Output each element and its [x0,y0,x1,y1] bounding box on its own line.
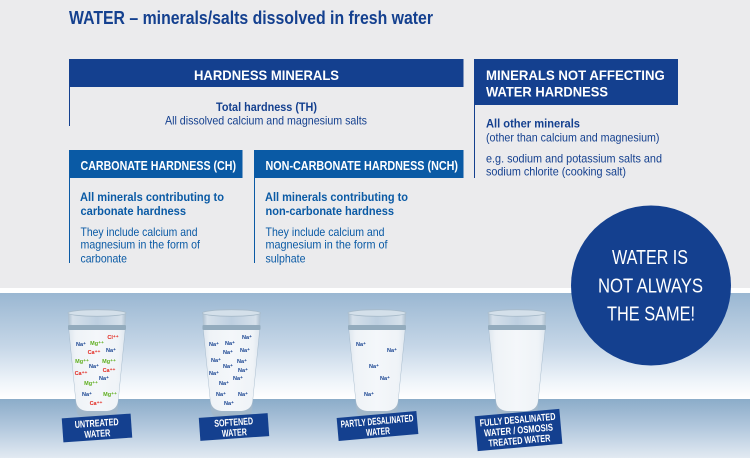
callout circle [571,206,731,366]
callout: water is not always the same [571,206,731,366]
title: WATER – minerals/salts dissolved in fresh water [69,8,433,28]
minerals not affecting heading: WATER HARDNESS [486,84,608,100]
mineral ions in untreated water: Cl⁺⁺ [107,334,119,341]
background: upper panel [0,0,750,288]
total hardness text [165,100,367,128]
glass: partly desalinated water [337,310,418,441]
carbonate hardness header [69,150,242,178]
mineral ions in untreated water: Na⁺ [106,347,116,354]
mineral ions in untreated water: Na⁺ [76,341,86,348]
mineral ions in untreated water: Mg⁺⁺ [102,358,116,365]
sodium ions in partly desalinated water: Na⁺ [369,363,379,370]
label: softened water [199,413,269,441]
sodium ions in softened water: Na⁺ [238,367,248,374]
minerals not affecting heading [486,67,665,100]
callout text: NOT ALWAYS [598,276,703,298]
mineral ions in untreated water: Mg⁺⁺ [90,340,104,347]
mineral ions in untreated water: Na⁺ [82,391,92,398]
glass: fully desalinated water [475,310,562,451]
non-carbonate hardness header [254,150,464,178]
sodium ions in softened water: Na⁺ [242,334,252,341]
sodium ions in softened water: Na⁺ [224,400,234,407]
carbonate hardness text: magnesium in the form of [80,238,201,252]
minerals not affecting text [486,117,662,179]
label: untreated water [62,414,132,442]
icon: glass 1 [68,310,126,416]
icon: glass 4 [488,310,546,416]
carbonate hardness heading: CARBONATE HARDNESS (CH) [80,159,236,173]
panel: carbonate hardness [69,150,242,266]
sodium ions in softened water: Na⁺ [238,391,248,398]
non-carbonate hardness text [265,190,408,266]
sodium ions in softened water: Na⁺ [233,375,243,382]
minerals not affecting text: (other than calcium and magnesium) [486,131,660,145]
carbonate hardness text [80,190,224,266]
label: partly desalinated water: PARTLY DESALINATED [340,413,414,431]
mineral ions in untreated water: Mg⁺⁺ [75,358,89,365]
sodium ions in softened water: Na⁺ [240,347,250,354]
carbonate hardness text: All minerals contributing to [80,190,224,204]
minerals not affecting header [474,59,678,105]
mineral ions in untreated water: Ca⁺⁺ [88,349,101,356]
sodium ions in partly desalinated water: Na⁺ [387,347,397,354]
panel: non-carbonate hardness [254,150,464,266]
label: untreated water: UNTREATED [74,417,119,431]
sodium ions in softened water: Na⁺ [237,358,247,365]
minerals not affecting left rule [474,105,475,178]
background: white strip [0,288,750,293]
minerals not affecting text: All other minerals [486,117,580,131]
mineral ions in untreated water: Mg⁺⁺ [84,380,98,387]
sodium ions in partly desalinated water: Na⁺ [364,391,374,398]
mineral ions in untreated water: Ca⁺⁺ [103,367,116,374]
mineral ions in untreated water: Ca⁺⁺ [90,400,103,407]
sodium ions in softened water: Na⁺ [223,349,233,356]
carbonate hardness text: carbonate [80,252,127,266]
glass: untreated water [62,310,132,442]
sodium ions in partly desalinated water [356,341,397,398]
carbonate hardness left rule [69,178,70,263]
carbonate hardness text: carbonate hardness [80,204,186,218]
hardness minerals heading: HARDNESS MINERALS [194,67,339,83]
label: partly desalinated water [337,411,418,441]
sodium ions in softened water: Na⁺ [216,391,226,398]
label: fully desalinated water [475,409,562,451]
total hardness text: All dissolved calcium and magnesium salts [165,114,367,128]
non-carbonate hardness text: non-carbonate hardness [266,204,394,218]
label: fully desalinated water: FULLY DESALINATED [479,412,556,429]
minerals not affecting text: e.g. sodium and potassium salts and [486,152,662,166]
panel: hardness minerals [69,59,464,128]
sodium ions in softened water [209,334,252,407]
label: untreated water: WATER [84,428,111,441]
sodium ions in softened water: Na⁺ [209,341,219,348]
sodium ions in softened water: Na⁺ [211,357,221,364]
minerals not affecting heading: MINERALS NOT AFFECTING [486,67,665,83]
sodium ions in softened water: Na⁺ [209,370,219,377]
glass: softened water [199,310,269,441]
sodium ions in partly desalinated water: Na⁺ [380,375,390,382]
panel: minerals not affecting water hardness [474,59,678,179]
non-carbonate hardness text: All minerals contributing to [265,190,408,204]
callout text [598,247,703,326]
mineral ions in untreated water: Mg⁺⁺ [103,391,117,398]
non-carbonate hardness heading: NON-CARBONATE HARDNESS (NCH) [266,159,458,173]
label: fully desalinated water: WATER / OSMOSIS [484,422,554,439]
sodium ions in partly desalinated water: Na⁺ [356,341,366,348]
label: softened water: WATER [222,427,248,440]
label: softened water: SOFTENED [214,416,254,430]
non-carbonate hardness left rule [254,178,255,263]
carbonate hardness text: They include calcium and [80,225,198,239]
minerals not affecting text: sodium chlorite (cooking salt) [486,165,626,179]
label: fully desalinated water: TREATED WATER [488,433,551,450]
icon: glass 3 [348,310,406,416]
icon: glass 2 [202,310,260,416]
label: partly desalinated water: WATER [366,426,391,439]
background: table surface [0,399,750,458]
non-carbonate hardness text: sulphate [266,252,306,266]
callout text: WATER IS [612,247,688,269]
mineral ions in untreated water: Na⁺ [89,363,99,370]
hardness minerals header [69,59,464,87]
mineral ions in untreated water [75,334,119,407]
hardness minerals left rule [69,87,70,126]
callout text: THE SAME! [607,304,695,326]
total hardness text: Total hardness (TH) [216,100,317,114]
mineral ions in untreated water: Na⁺ [99,375,109,382]
non-carbonate hardness text: magnesium in the form of [266,238,388,252]
sodium ions in softened water: Na⁺ [225,340,235,347]
sodium ions in softened water: Na⁺ [219,380,229,387]
mineral ions in untreated water: Ca⁺⁺ [75,370,88,377]
sodium ions in softened water: Na⁺ [223,363,233,370]
non-carbonate hardness text: They include calcium and [266,225,384,239]
background: blue water backdrop [0,293,750,399]
